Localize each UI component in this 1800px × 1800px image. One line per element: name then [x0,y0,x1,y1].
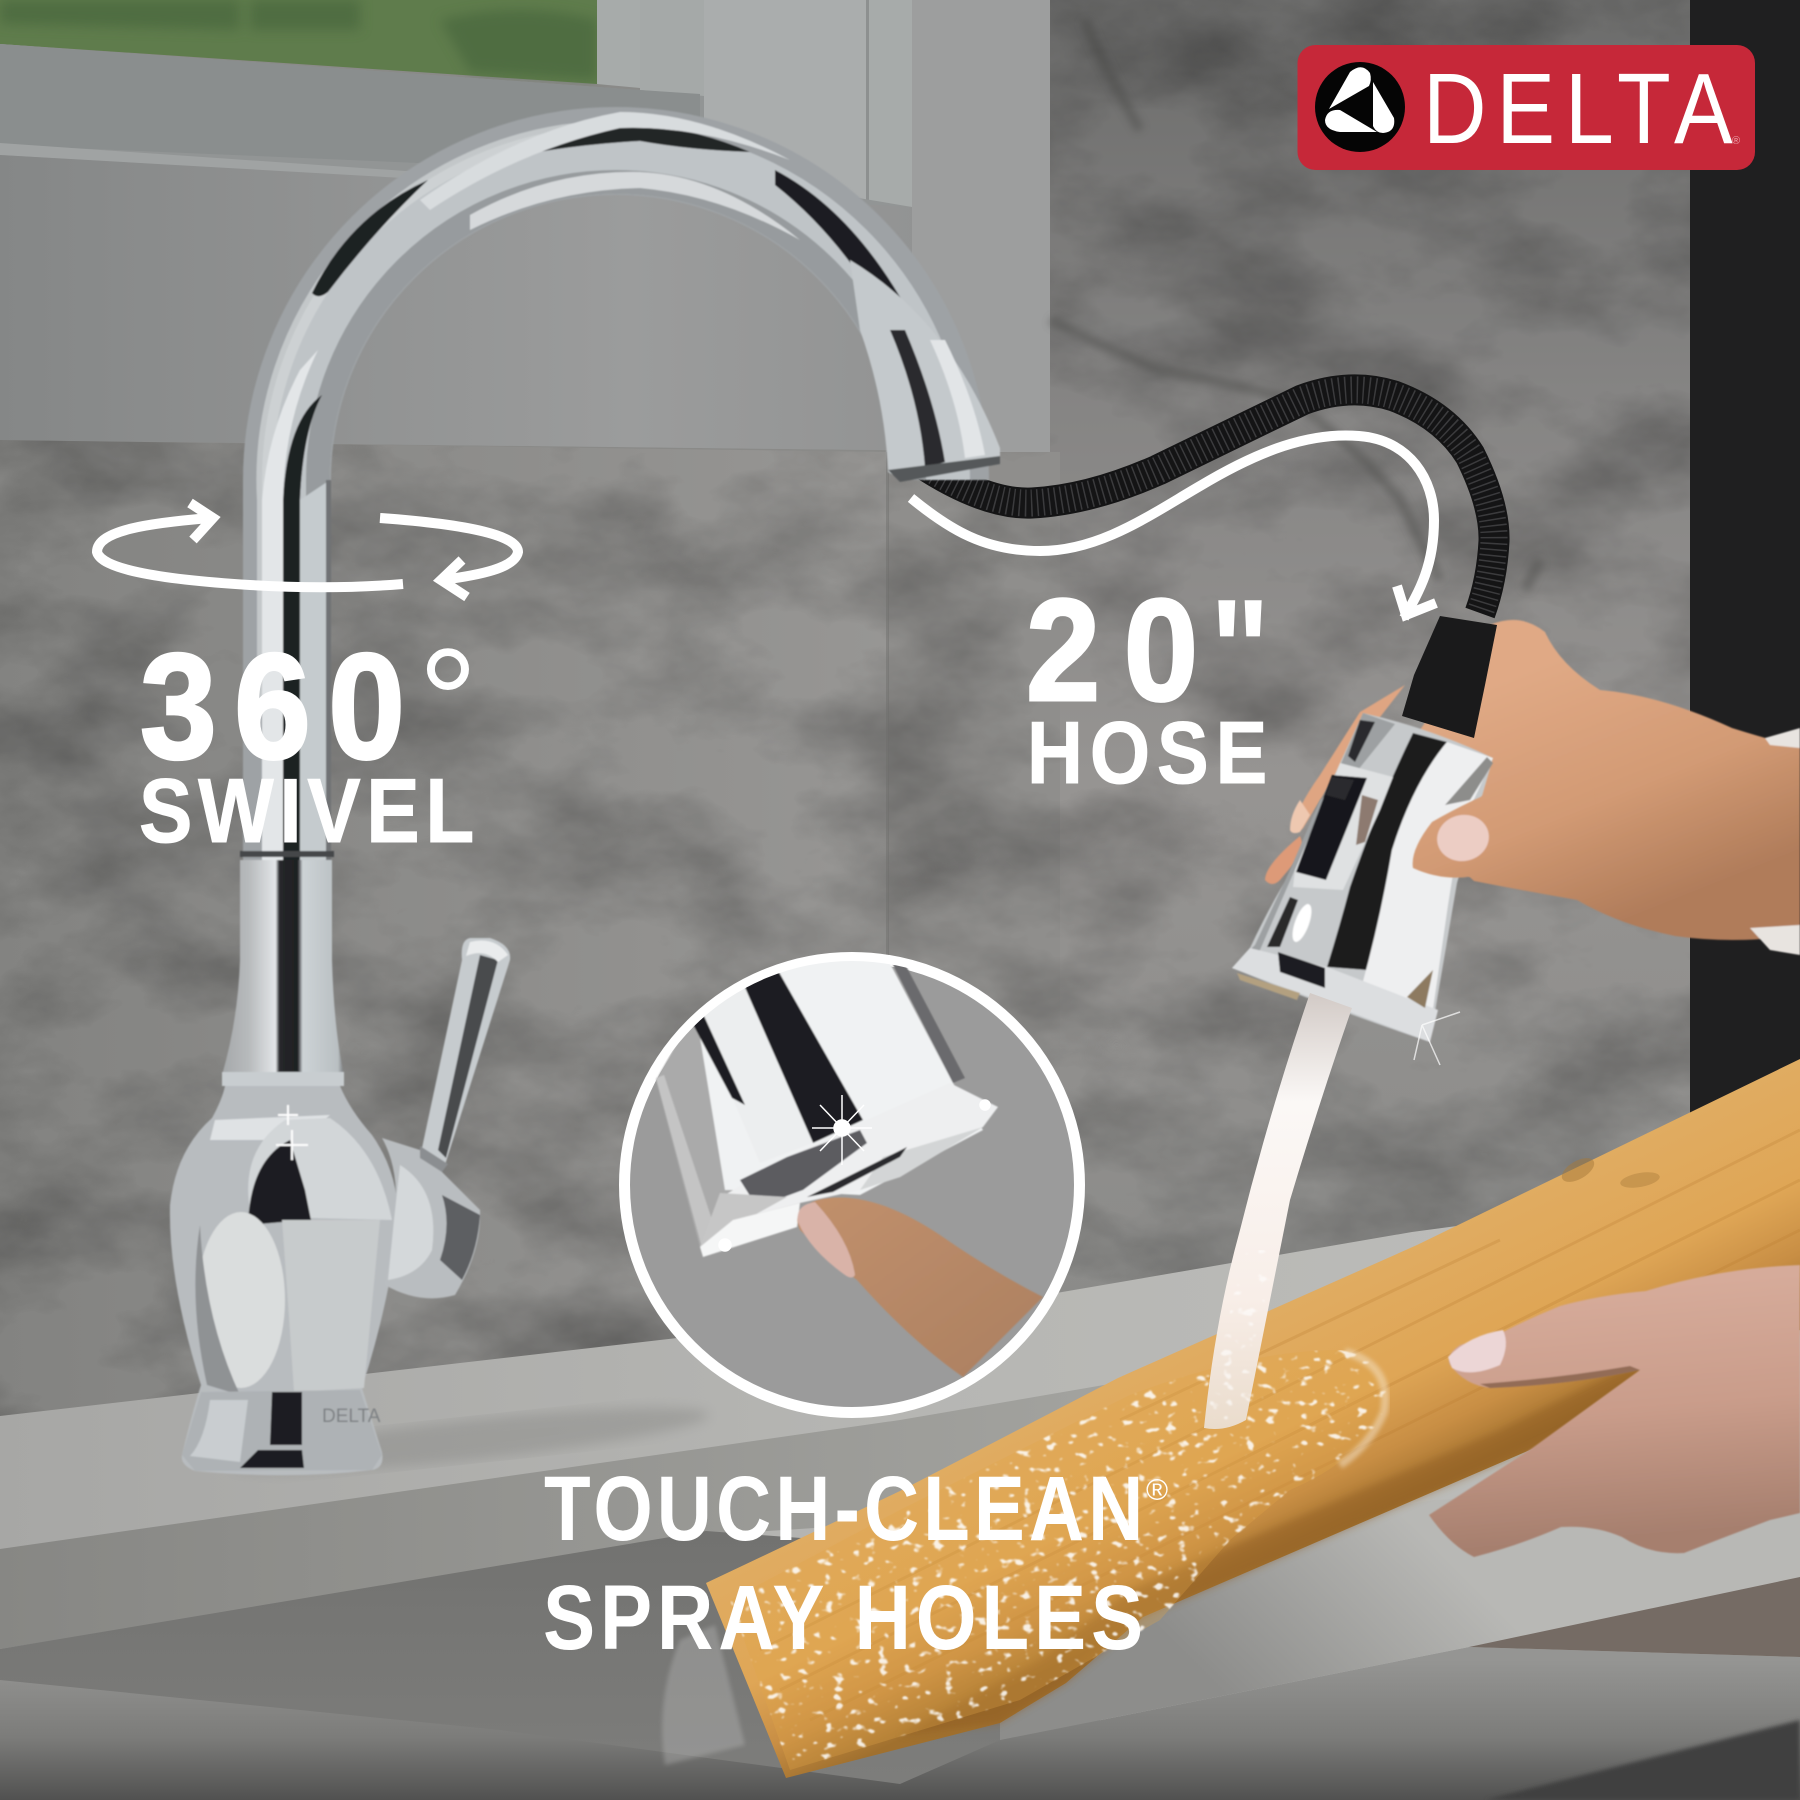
window sill [0,0,1050,452]
dark reflection [1327,733,1447,970]
sink surfaces [0,1647,1800,1800]
label: 360 swivel [139,617,478,862]
spray hole slot [807,1147,907,1197]
finger nail [798,1202,855,1278]
label: touch-clean spray holes: SPRAY HOLES [543,1567,1143,1669]
wall below sill [0,155,1050,452]
swivel ring [240,851,334,857]
thumb [1413,769,1598,880]
label: 20 inch hose: " [1210,569,1270,731]
splash off the end of the board [662,1625,745,1765]
label: 360 swivel: 360 [140,623,405,790]
wet patch edge [1340,1352,1385,1465]
faucet neck and arc [264,129,945,1090]
cutting board [662,1059,1800,1778]
label: 20 inch hose [1026,569,1270,802]
sprayer sparkle [1414,1012,1460,1065]
faucet flare [222,860,344,1075]
inset circle: touch-clean close-up [624,930,1080,1412]
dark lower edge of board [900,1280,1800,1735]
sparkles on body [276,1105,308,1160]
hose collar [1402,616,1497,738]
button surround [1293,763,1393,890]
hand: palm and fingers behind sprayer [1265,620,1800,955]
dark panel at right [1690,0,1800,1300]
bamboo grain [760,1130,1800,1720]
collar [222,1072,344,1086]
faucet lever [422,938,510,1165]
spray head rim [725,1083,998,1220]
translucent left side of spray head [656,1026,732,1246]
finger [797,1198,1043,1377]
spray head body [700,961,984,1196]
label: touch-clean spray holes: ® [1146,1474,1168,1507]
sprayer head [1232,713,1493,1042]
faucet chrome stripes [283,395,322,1100]
fingernail [1448,1330,1506,1372]
sparkle [719,1095,990,1251]
wordmark: DELTA [1423,53,1733,164]
360 swivel arrows [97,503,518,597]
window view: greenery [0,0,597,84]
water droplets on top [1558,1153,1598,1187]
faucet handle hub [382,1138,480,1298]
shadow of faucet on counter [229,1395,711,1485]
faucet base [182,1390,382,1471]
Delta logo badge [1298,45,1755,170]
label: 360 swivel: ° [418,617,478,785]
label: 360 swivel: SWIVEL [139,760,474,862]
label: touch-clean spray holes [543,1456,1168,1669]
lens left inside [711,1192,786,1233]
logo emblem [1315,62,1405,152]
wet patch [730,1350,1387,1770]
label: 20 inch hose: HOSE [1027,703,1267,802]
window frame [597,0,912,207]
marble wall upper right [1050,0,1690,1300]
label: 20 inch hose: 20 [1026,569,1198,731]
faucet body [170,1086,398,1475]
marble backsplash left [0,440,888,1420]
sleeve cuff [1750,728,1800,955]
faucet [170,112,1000,1475]
hose length arrow [911,435,1436,618]
label: touch-clean spray holes: TOUCH-CLEAN [544,1456,1143,1560]
countertop [0,1180,1800,1800]
hose [920,390,1494,613]
water stream [1204,993,1352,1429]
registered mark: ® [1732,135,1740,147]
lower hand holding the board [1429,1265,1800,1557]
spout end [850,260,1000,479]
spray button [1296,775,1367,880]
marble veins [1050,20,1540,590]
inset contents clipped to circle [656,930,1043,1377]
brand mark on base: DELTA [322,1406,381,1427]
